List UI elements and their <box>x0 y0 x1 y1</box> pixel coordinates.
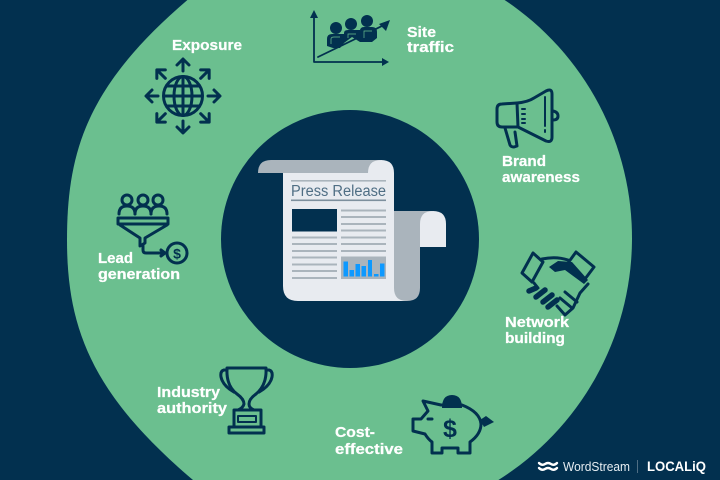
label: Brand awareness: awareness <box>502 169 580 186</box>
label: Cost-effective: Cost- <box>335 424 375 441</box>
label: Brand awareness <box>502 153 580 186</box>
icon: trophy <box>221 368 272 433</box>
document page <box>283 160 407 301</box>
icon: megaphone <box>497 90 558 147</box>
icon: piggy bank <box>413 395 494 453</box>
label: Cost-effective: effective <box>335 441 403 458</box>
document photo block <box>292 209 337 232</box>
label: Site traffic <box>407 24 454 56</box>
document top scroll <box>258 160 380 173</box>
label: Cost-effective <box>335 424 403 458</box>
label: Site traffic: traffic <box>407 39 454 56</box>
green outer ring <box>67 0 632 480</box>
label: Network building: building <box>505 330 565 347</box>
dark inner circle <box>221 110 479 368</box>
icon: lead funnel <box>118 195 187 263</box>
icon: press release document <box>258 160 446 301</box>
label: Network building: Network <box>505 314 570 331</box>
label: Brand awareness: Brand <box>502 153 546 170</box>
icon: lead funnel: $ <box>173 246 181 262</box>
label: Lead generation: Lead <box>98 250 133 267</box>
document right column lines <box>341 210 386 252</box>
icon: piggy bank: $ <box>443 415 457 443</box>
icon: globe with arrows <box>146 59 220 133</box>
document left column lines <box>292 236 337 279</box>
label: Lead generation: generation <box>98 266 180 283</box>
label: Lead generation <box>98 250 180 283</box>
label: Exposure: Exposure <box>172 37 242 54</box>
label: Site traffic: Site <box>407 24 436 41</box>
WordStream wordmark: WordStream <box>563 459 630 474</box>
document bar chart <box>341 256 386 279</box>
document headline: Press Release <box>291 183 386 200</box>
label: Industry authority <box>157 384 228 417</box>
icon: WordStream waves <box>539 463 557 470</box>
label: Industry authority: authority <box>157 400 228 417</box>
label: Industry authority: Industry <box>157 384 221 401</box>
document right scroll <box>394 211 432 301</box>
document scroll tip <box>420 211 446 247</box>
icon: handshake <box>522 252 594 315</box>
label: Network building <box>505 314 570 347</box>
logo: WordStream and LOCALiQ <box>539 459 706 474</box>
icon: site traffic chart <box>310 10 390 66</box>
LOCALiQ wordmark: LOCALiQ <box>647 459 706 474</box>
